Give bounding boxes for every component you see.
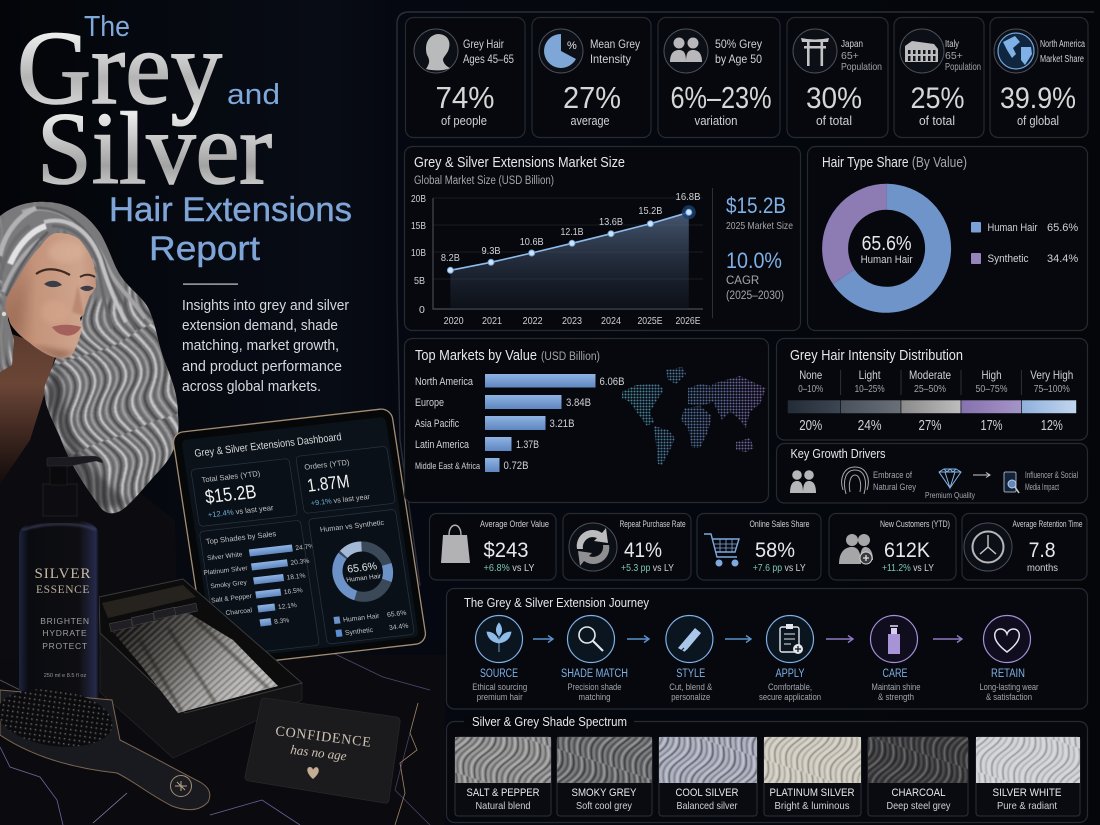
title block: and [227, 79, 280, 111]
step: care [870, 616, 920, 702]
shampoo bottle: 250 ml e 8.5 fl oz [44, 673, 86, 679]
bar chart: Asia Pacific [415, 418, 459, 430]
confidence card: has no age [290, 742, 348, 763]
bar chart: 3.21B [550, 418, 574, 430]
panel: grey hair intensity distribution: 50–75% [976, 383, 1008, 395]
swatch: cool silver [659, 737, 757, 816]
market size stats [726, 193, 793, 302]
KPI card: Japan: Population [841, 61, 882, 73]
KPI: online sales share [697, 514, 821, 580]
icon: people [790, 470, 816, 493]
panel: key growth drivers [776, 444, 1088, 503]
title block [17, 9, 352, 268]
line chart: 2025E [638, 315, 662, 327]
icon: clock [964, 523, 1012, 571]
step: retain: & satisfaction [986, 692, 1032, 702]
KPI card: North America: 39.9% [1000, 82, 1076, 115]
swatch: salt and pepper: SALT & PEPPER [466, 787, 540, 799]
panel: hair type share donut: Hair Type Share (By Value) [822, 155, 967, 171]
panel: shade spectrum [446, 715, 1088, 822]
shampoo bottle: HYDRATE [43, 628, 87, 638]
KPI card: North America [990, 18, 1088, 138]
KPI: online sales share: 58% [755, 539, 795, 562]
KPI card: mean grey intensity [532, 18, 651, 138]
step: style [666, 616, 713, 702]
stacked intensity bar [788, 400, 1076, 414]
KPI: average retention time: 7.8 [1029, 539, 1056, 562]
swatch: smoky grey [557, 737, 652, 816]
panel: grey hair intensity distribution: 17% [980, 417, 1002, 434]
KPI card: Italy: 65+ [945, 50, 963, 62]
panel: key growth drivers: Premium Quality [925, 490, 976, 500]
icon: two people [664, 29, 708, 73]
step: retain: Long-lasting wear [980, 682, 1038, 692]
KPI card: 50% grey by age 50: 6%–23% [670, 80, 772, 115]
market size stats: (2025–2030) [726, 290, 784, 302]
bar chart: 6.06B [600, 376, 624, 388]
icon: shopping bag [441, 525, 470, 563]
KPI: new customers: +11.2% vs LY [882, 562, 934, 574]
swatch: charcoal: CHARCOAL [892, 787, 946, 799]
tablet: human vs synthetic donut: Human Hair [346, 573, 382, 584]
KPI card: grey hair ages 45-65: of people [441, 113, 487, 128]
line chart: 8.2B [441, 252, 460, 264]
line chart: 15B [411, 220, 426, 232]
tablet: human vs synthetic donut: Human Hair [343, 613, 381, 624]
KPI card: mean grey intensity: Mean Grey [590, 37, 640, 51]
tablet: total sales card: $15.2B [204, 482, 258, 508]
swatch: platinum silver: Bright & luminous [774, 800, 850, 812]
tablet: top shades bar chart: Silver White [207, 551, 243, 562]
step: style: personalize [671, 692, 710, 702]
swatch: platinum silver [764, 737, 861, 816]
tablet: human vs synthetic donut: 65.6% [346, 560, 379, 576]
line chart: 9.3B [482, 245, 500, 257]
line chart: 10.6B [520, 236, 544, 248]
bar chart: 3.84B [566, 397, 591, 409]
icon: people with plus [839, 534, 873, 564]
tablet: top shades bar chart: 18.1% [286, 573, 306, 582]
KPI: average retention time: months [1027, 562, 1058, 574]
intro text: extension demand, shade [182, 318, 338, 334]
panel: extension journey: The Grey & Silver Extension Journey [464, 596, 650, 610]
step: retain [980, 616, 1038, 702]
panel: grey hair intensity distribution: None [799, 368, 822, 382]
step: apply: Comfortable, [768, 682, 812, 692]
KPI card: grey hair ages 45-65: Grey Hair [463, 37, 504, 51]
panel: top markets by value [404, 338, 768, 502]
icon: pie chart: % [567, 40, 577, 52]
KPI: repeat purchase rate: Repeat Purchase Rate [620, 519, 686, 530]
line chart: 2020 [444, 315, 464, 327]
market size stats: 10.0% [726, 248, 782, 273]
panel: extension journey [446, 588, 1088, 709]
tablet: orders card: +9.1% vs last year [310, 492, 371, 508]
line chart: 2024 [601, 315, 621, 327]
bar chart: 0.72B [504, 460, 528, 472]
donut chart: 65.6% [862, 233, 912, 255]
step: source: SOURCE [480, 668, 518, 680]
KPI card: 50% grey by age 50 [658, 18, 780, 138]
tablet: top shades bar chart: Charcoal [225, 607, 253, 617]
arrow [627, 636, 649, 642]
swatch: charcoal [868, 737, 968, 816]
step: source: Ethical sourcing [472, 682, 527, 692]
title block: Grey [17, 9, 222, 126]
KPI: new customers: 612K [884, 539, 930, 562]
icon: head with hair lines [842, 467, 868, 494]
hair brush [0, 682, 210, 810]
market size stats: $15.2B [726, 193, 786, 218]
panel: key growth drivers: Key Growth Drivers [790, 446, 886, 461]
swatch: platinum silver: PLATINUM SILVER [770, 787, 855, 799]
intro text: across global markets. [182, 379, 321, 395]
panel: key growth drivers: Media Impact [1025, 482, 1059, 493]
panel: grey hair intensity distribution: 0–10% [798, 383, 823, 395]
KPI card: North America: Market Share [1040, 54, 1084, 65]
tablet: human vs synthetic donut [308, 509, 414, 644]
panel: hair type share donut [808, 146, 1088, 330]
shampoo bottle: ESSENCE [36, 584, 90, 596]
shampoo bottle [19, 456, 103, 700]
icon: phone with magnifier [1004, 472, 1019, 493]
KPI card: Japan: Japan [841, 38, 863, 50]
swatch: smoky grey: SMOKY GREY [572, 787, 637, 799]
legend: 34.4% [1047, 253, 1078, 265]
line chart: 5B [414, 275, 425, 287]
swatch: salt and pepper [455, 737, 551, 816]
outer dashboard frame [397, 12, 1094, 586]
step: source: premium hair [477, 692, 523, 702]
KPI card: Japan: of total [816, 113, 852, 128]
tablet: human vs synthetic donut: Synthetic [345, 627, 374, 637]
confidence card: CONFIDENCE [275, 724, 372, 751]
tablet: human vs synthetic donut: 65.6% [387, 610, 407, 619]
icon: shopping cart [704, 534, 739, 566]
donut chart: Human Hair [861, 254, 913, 266]
KPI: repeat purchase rate [563, 514, 691, 580]
KPI card: Japan [787, 18, 888, 138]
panel: grey hair intensity distribution: Light [859, 368, 881, 382]
step: shade match [561, 616, 628, 702]
panel: grey hair intensity distribution: 20% [799, 417, 822, 434]
step: apply: APPLY [776, 668, 805, 680]
KPI card: grey hair ages 45-65: Ages 45–65 [463, 52, 514, 66]
legend [971, 222, 1078, 265]
icon: globe [994, 29, 1038, 73]
step: apply: secure application [759, 692, 821, 702]
step: style: STYLE [676, 668, 705, 680]
intro text: and product performance [182, 359, 342, 375]
legend: 65.6% [1047, 222, 1078, 234]
donut chart [835, 197, 938, 300]
KPI: average order value: +6.8% vs LY [484, 562, 534, 574]
legend: Human Hair [988, 222, 1038, 234]
swatch: cool silver: Balanced silver [676, 800, 738, 812]
line chart: 10B [411, 247, 426, 259]
KPI: repeat purchase rate: 41% [624, 539, 662, 562]
KPI card: Italy: Italy [945, 38, 960, 50]
swatch: cool silver: COOL SILVER [676, 787, 739, 799]
swatch: silver white: Pure & radiant [997, 800, 1057, 812]
bar chart: Latin America [415, 439, 470, 451]
KPI: average order value [430, 514, 556, 580]
line chart [411, 191, 703, 327]
bar chart: North America [415, 376, 474, 388]
step: shade match: matching [578, 692, 610, 702]
KPI card: Italy: 25% [910, 82, 964, 115]
KPI card: mean grey intensity: average [570, 113, 610, 128]
panel: top markets by value: (USD Billion) [541, 351, 600, 363]
swatch: silver white: SILVER WHITE [992, 787, 1062, 799]
panel: grey hair intensity distribution: 12% [1041, 417, 1063, 434]
tablet: total sales card: Total Sales (YTD) [201, 469, 261, 485]
line chart: 13.6B [599, 216, 623, 228]
tablet: top shades bar chart: Top Shades by Sales [205, 529, 277, 546]
step: care: CARE [882, 668, 908, 680]
line chart: 12.1B [560, 226, 584, 238]
KPI card: Italy: of total [919, 113, 955, 128]
step: style: Cut, blend & [669, 682, 712, 692]
tablet: human vs synthetic donut: Human vs Synthetic [319, 518, 385, 534]
icon: head silhouette [414, 29, 458, 73]
bar chart [415, 374, 624, 472]
bar chart: Middle East & Africa [415, 461, 481, 472]
KPI card: Italy [894, 18, 984, 138]
arrow [933, 636, 962, 642]
shampoo bottle: SILVER [34, 566, 92, 582]
KPI card: Japan: 30% [806, 82, 862, 115]
confidence card [245, 698, 400, 803]
KPI: repeat purchase rate: +5.3 pp vs LY [621, 562, 674, 574]
intro text: matching, market growth, [182, 338, 339, 354]
step: retain: RETAIN [991, 668, 1025, 680]
arrow [725, 636, 751, 642]
tablet: top shades bar chart: 8.3% [274, 617, 290, 626]
intro text [182, 284, 349, 395]
line chart: 15.2B [638, 205, 662, 217]
swatch: smoky grey: Soft cool grey [576, 800, 633, 812]
panel: key growth drivers: Embrace of [873, 470, 912, 481]
panel: grey hair intensity distribution: Moderate [909, 368, 951, 382]
icon: circular arrows [569, 523, 617, 571]
KPI card: 50% grey by age 50: variation [694, 113, 738, 128]
KPI: new customers [829, 514, 956, 580]
panel: grey hair intensity distribution: Very High [1030, 368, 1073, 382]
intro text: Insights into grey and silver [182, 298, 349, 314]
bar chart: 1.37B [516, 439, 539, 451]
panel: grey hair intensity distribution: 25–50% [914, 383, 946, 395]
panel: grey hair intensity distribution: High [982, 368, 1002, 382]
tablet: top shades bar chart: Smoky Grey [210, 579, 248, 590]
tablet: total sales card [191, 458, 298, 527]
panel: market size line chart: Grey & Silver Extensions Market Size [414, 154, 625, 171]
bar chart: Europe [415, 397, 444, 409]
tablet dashboard [172, 408, 427, 668]
tablet: orders card [296, 446, 395, 514]
shampoo bottle: PROTECT [42, 641, 88, 651]
arrow [826, 636, 853, 642]
panel: key growth drivers: Natural Grey [873, 482, 916, 493]
title block: Hair Extensions [109, 191, 352, 229]
tablet: top shades bar chart [197, 519, 329, 657]
KPI card: Japan: 65+ [841, 50, 859, 62]
step: source [472, 616, 527, 702]
panel: top markets by value: Top Markets by Value [415, 348, 537, 364]
step: care: & strength [878, 692, 914, 702]
step: apply [759, 616, 821, 702]
step: shade match: Precision shade [568, 682, 622, 692]
title block: The [84, 11, 130, 43]
panel: grey hair intensity distribution [776, 338, 1088, 440]
line chart: 2023 [562, 315, 582, 327]
KPI: average order value: Average Order Value [480, 519, 549, 530]
tablet: top shades bar chart: 12.1% [278, 602, 297, 611]
title block: Report [149, 230, 261, 268]
tablet: orders card: 1.87M [306, 471, 351, 496]
tablet: top shades bar chart: Salt & Pepper [211, 593, 253, 605]
extensions box [99, 579, 302, 758]
tablet: top shades bar chart: 20.3% [290, 558, 310, 567]
icon: torii gate [793, 29, 837, 73]
tablet: total sales card: +12.4% vs last year [207, 503, 275, 519]
step: care: Maintain shine [872, 682, 920, 692]
market size stats: 2025 Market Size [726, 220, 793, 232]
panel: grey hair intensity distribution: 10–25% [855, 383, 885, 395]
line chart: 2026E [676, 315, 700, 327]
tablet: orders card: Orders (YTD) [304, 458, 350, 472]
swatch: salt and pepper: Natural blend [476, 800, 531, 812]
step: shade match: SHADE MATCH [561, 668, 628, 680]
KPI card: grey hair ages 45-65: 74% [436, 80, 494, 115]
market size stats: CAGR [726, 275, 759, 287]
KPI card: grey hair ages 45-65 [406, 18, 525, 138]
icon: diamond [939, 469, 961, 488]
KPI card: 50% grey by age 50: by Age 50 [715, 52, 762, 66]
tablet: top shades bar chart: 16.5% [283, 587, 303, 596]
arrow [973, 472, 990, 478]
swatch: charcoal: Deep steel grey [886, 800, 951, 812]
KPI card: 50% grey by age 50: 50% Grey [715, 37, 762, 51]
dotted world map [620, 365, 768, 467]
panel: market size line chart: Global Market Size (USD Billion) [414, 175, 554, 187]
woman portrait [0, 202, 179, 655]
tablet: human vs synthetic donut: 34.4% [389, 623, 409, 632]
KPI: new customers: New Customers (YTD) [880, 519, 950, 530]
line chart: 20B [411, 193, 426, 205]
KPI card: mean grey intensity: Intensity [590, 52, 631, 66]
panel: grey hair intensity distribution: 27% [918, 417, 942, 434]
KPI: average order value: $243 [484, 539, 528, 562]
title block: Silver [37, 92, 272, 206]
legend: Synthetic [988, 253, 1029, 265]
panel: grey hair intensity distribution: 75–100% [1034, 383, 1070, 395]
line chart: 2021 [482, 315, 502, 327]
tablet: top shades bar chart: Platinum Silver [203, 565, 249, 577]
tablet heading: Grey & Silver Extensions Dashboard [194, 431, 343, 460]
marble table [0, 653, 445, 825]
swatch: silver white [976, 737, 1080, 816]
line chart: 0 [419, 304, 425, 316]
icon: colosseum [900, 29, 944, 73]
arrow [533, 636, 553, 642]
shampoo bottle: BRIGHTEN [40, 616, 90, 626]
panel: grey hair intensity distribution: Grey Hair Intensity Distribution [790, 348, 963, 364]
KPI card: North America: of global [1017, 113, 1059, 128]
line chart: 2022 [523, 315, 543, 327]
KPI card: Italy: Population [945, 61, 981, 73]
KPI: online sales share: +7.6 pp vs LY [753, 562, 806, 574]
panel: market size line chart [404, 146, 800, 330]
panel: grey hair intensity distribution: 24% [858, 417, 882, 434]
KPI card: mean grey intensity: 27% [563, 80, 621, 115]
KPI: average retention time [962, 514, 1087, 580]
panel: shade spectrum: Silver & Grey Shade Spectrum [472, 715, 627, 729]
tablet: top shades bar chart: 24.7% [295, 543, 315, 552]
line chart: 16.8B [676, 191, 700, 203]
KPI: online sales share: Online Sales Share [750, 519, 810, 530]
